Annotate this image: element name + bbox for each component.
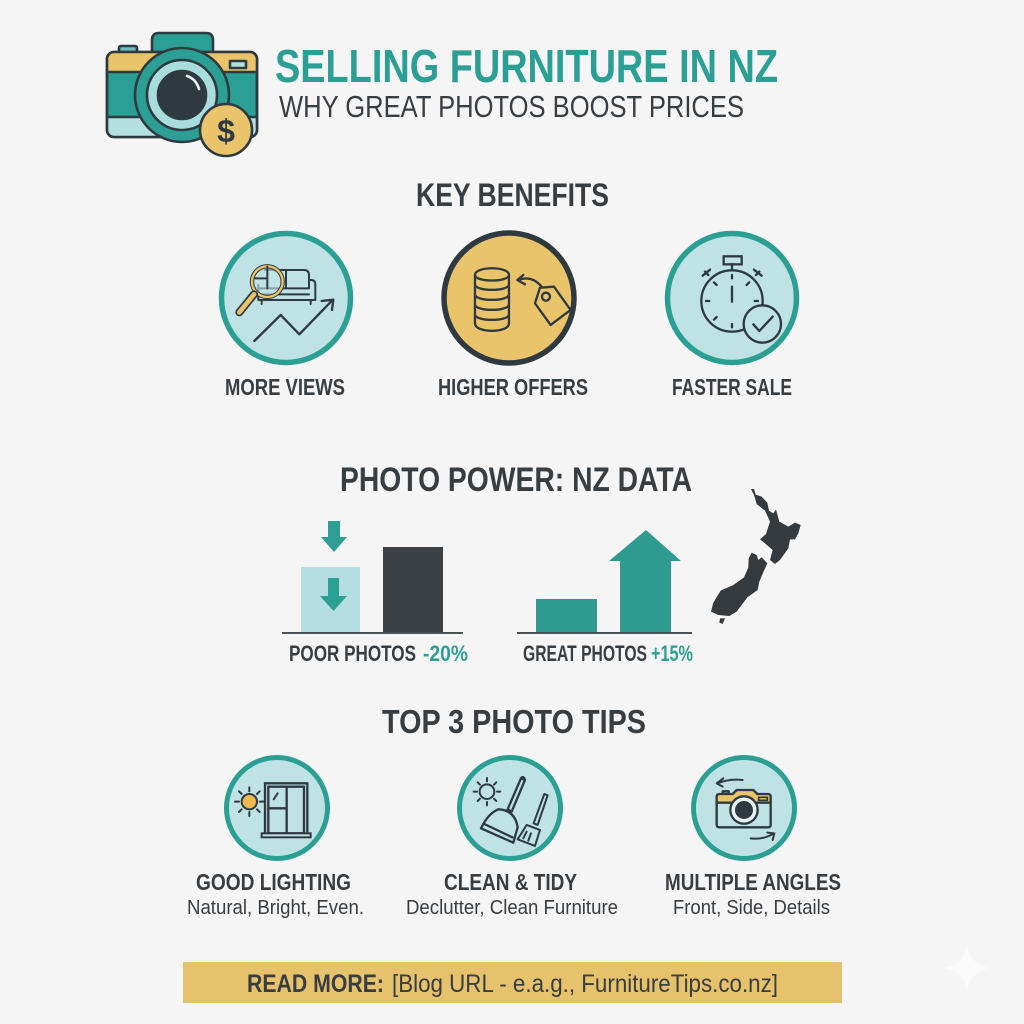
label: faster sale: FASTER SALE [672, 374, 792, 400]
heading: photo power: PHOTO POWER: NZ DATA [340, 461, 692, 499]
bar: poor photos light [301, 567, 360, 633]
label: more views: MORE VIEWS [225, 374, 345, 400]
label: great photos: GREAT PHOTOS [523, 641, 647, 666]
caption: clean and tidy: Declutter, Clean Furniture [406, 897, 618, 919]
icon: camera with rotation arrows [694, 758, 794, 858]
subtitle: WHY GREAT PHOTOS BOOST PRICES [279, 89, 744, 124]
icon: down arrow above bar [321, 521, 347, 552]
caption: multiple angles: Front, Side, Details [673, 897, 830, 919]
icon: magnifier over sofa with rising chart [222, 234, 350, 362]
heading: top 3 photo tips: TOP 3 PHOTO TIPS [382, 703, 646, 740]
banner label: READ MORE: [247, 970, 384, 998]
icon: sun, dustpan and broom [460, 758, 560, 858]
title: SELLING FURNITURE IN NZ [275, 40, 778, 92]
bar: great photos arrow [609, 530, 681, 633]
icon: camera with dollar coin: $ [217, 113, 235, 149]
chart: poor photos [282, 521, 468, 666]
icon: down arrow in bar [320, 578, 347, 611]
label: multiple angles: MULTIPLE ANGLES [665, 869, 841, 895]
panel: higher offers [438, 233, 588, 400]
panel: clean and tidy [406, 758, 618, 919]
heading: key benefits: KEY BENEFITS [416, 177, 609, 213]
label: poor photos: POOR PHOTOS [289, 641, 416, 666]
panel: faster sale [668, 234, 796, 400]
icon: camera with dollar coin [107, 33, 257, 156]
label: clean and tidy: CLEAN & TIDY [444, 869, 577, 895]
icon: sun and window [226, 758, 328, 858]
panel: more views [222, 234, 350, 400]
icon: stopwatch with check [668, 234, 796, 362]
bar: great photos small [536, 599, 597, 633]
chart: great photos [517, 530, 693, 666]
panel: good lighting [187, 758, 364, 919]
banner: read more [183, 962, 842, 1003]
banner link text: [Blog URL - e.a.g., FurnitureTips.co.nz] [392, 970, 778, 998]
bar: poor photos dark [383, 547, 443, 633]
value: +15%: +15% [651, 641, 693, 666]
label: good lighting: GOOD LIGHTING [196, 869, 351, 895]
label: higher offers: HIGHER OFFERS [438, 374, 588, 400]
icon: coin stack with price tag [444, 233, 574, 363]
value: -20%: -20% [423, 641, 468, 666]
caption: good lighting: Natural, Bright, Even. [187, 897, 364, 919]
icon: map of New Zealand [711, 489, 801, 624]
panel: multiple angles [665, 758, 841, 919]
